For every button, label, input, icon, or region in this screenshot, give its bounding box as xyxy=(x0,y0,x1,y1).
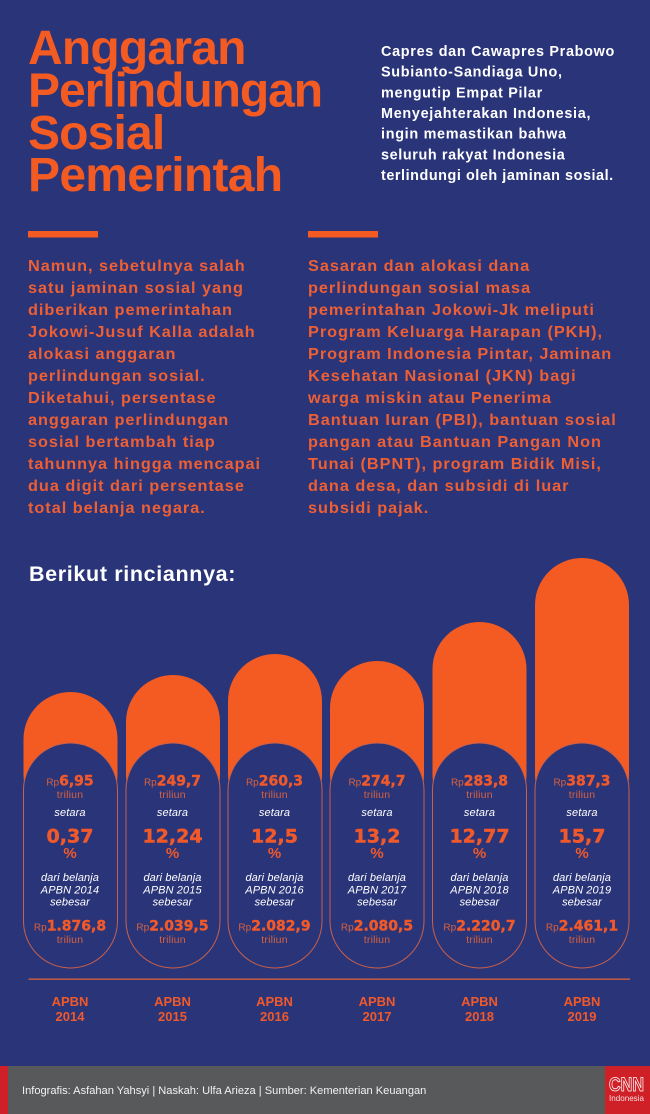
left body text: Diketahui, persentase xyxy=(28,390,217,407)
column: APBN 2016: APBN xyxy=(256,994,293,1009)
column: APBN 2015: Rp2.039,5 xyxy=(136,918,209,934)
title: Pemerintah xyxy=(28,149,282,202)
column: APBN 2015 xyxy=(126,675,220,1024)
right body text: dana desa, dan subsidi di luar xyxy=(308,478,569,495)
column: APBN 2019: triliun xyxy=(569,789,595,801)
intro text block: Menyejahterakan Indonesia, xyxy=(381,106,591,122)
column: APBN 2015: triliun xyxy=(159,934,186,946)
right body text: Bantuan Iuran (PBI), bantuan sosial xyxy=(308,412,617,429)
column: APBN 2018: APBN 2018 xyxy=(449,884,509,896)
column: APBN 2017: triliun xyxy=(364,789,390,801)
right body text: Kesehatan Nasional (JKN) bagi xyxy=(308,368,577,385)
column: APBN 2014: APBN xyxy=(52,994,88,1009)
right body text: Sasaran dan alokasi dana xyxy=(308,258,530,275)
left body text: tahunnya hingga mencapai xyxy=(28,456,261,473)
column: APBN 2016: 2016 xyxy=(260,1009,289,1024)
intro text block xyxy=(381,44,615,184)
logo: CNN Indonesia: CNN xyxy=(609,1074,644,1096)
column: APBN 2015: % xyxy=(166,845,179,862)
right column accent bar xyxy=(308,231,378,238)
column: APBN 2017: Rp274,7 xyxy=(348,774,406,790)
column: APBN 2017: % xyxy=(370,845,384,862)
intro text block: Capres dan Cawapres Prabowo xyxy=(381,44,615,60)
column: APBN 2016: APBN 2016 xyxy=(244,884,304,896)
column: APBN 2017: 13,2 xyxy=(354,826,400,848)
column: APBN 2017: sebesar xyxy=(357,897,398,909)
right body text: pemerintahan Jokowi-Jk meliputi xyxy=(308,302,595,319)
title xyxy=(28,22,322,202)
column: APBN 2019: triliun xyxy=(569,934,595,946)
right body text: perlindungan sosial masa xyxy=(308,280,531,297)
column: APBN 2018: Rp283,8 xyxy=(451,774,508,790)
left body text: sosial bertambah tiap xyxy=(28,434,216,451)
intro text block: terlindungi oleh jaminan sosial. xyxy=(381,168,614,184)
column: APBN 2016: triliun xyxy=(261,934,288,946)
column: APBN 2018: 2018 xyxy=(465,1009,494,1024)
column: APBN 2018: APBN xyxy=(461,994,498,1009)
column: APBN 2019: % xyxy=(575,845,589,862)
column: APBN 2019: sebesar xyxy=(562,897,603,909)
column: APBN 2018: sebesar xyxy=(460,897,501,909)
title: Perlindungan xyxy=(28,64,322,118)
column: APBN 2018: triliun xyxy=(466,789,493,801)
column: APBN 2014 xyxy=(24,692,118,1024)
left body text xyxy=(28,258,261,517)
left body text: satu jaminan sosial yang xyxy=(28,280,244,297)
left body text: anggaran perlindungan xyxy=(28,412,229,429)
left body text: alokasi anggaran xyxy=(28,346,176,363)
right body text: pangan atau Bantuan Pangan Non xyxy=(308,434,602,451)
left column accent bar xyxy=(28,231,98,238)
column: APBN 2016 xyxy=(228,654,322,1024)
title: Sosial xyxy=(28,107,164,160)
left body text: perlindungan sosial. xyxy=(28,368,206,385)
column: APBN 2017: 2017 xyxy=(363,1009,391,1024)
column: APBN 2015: triliun xyxy=(159,789,186,801)
column: APBN 2016: triliun xyxy=(261,789,288,801)
right body text: warga miskin atau Penerima xyxy=(307,390,552,407)
column: APBN 2015: sebesar xyxy=(153,897,194,909)
column: APBN 2015: dari belanja xyxy=(143,872,202,884)
column: APBN 2014: triliun xyxy=(57,789,83,801)
left body text: Namun, sebetulnya salah xyxy=(28,258,246,275)
column: APBN 2016: Rp260,3 xyxy=(246,774,303,790)
column: APBN 2017: dari belanja xyxy=(348,872,406,884)
column: APBN 2019: Rp387,3 xyxy=(553,774,611,790)
logo: CNN Indonesia: Indonesia xyxy=(609,1093,644,1103)
column: APBN 2015: 12,24 xyxy=(142,826,203,848)
column: APBN 2014: dari belanja xyxy=(41,872,99,884)
column: APBN 2014: setara xyxy=(54,807,86,819)
column: APBN 2016: % xyxy=(268,845,281,862)
column: APBN 2019: 2019 xyxy=(568,1009,596,1024)
left body text: total belanja negara. xyxy=(28,500,206,517)
column: APBN 2017: triliun xyxy=(364,934,390,946)
column: APBN 2016: 12,5 xyxy=(251,826,298,848)
column: APBN 2015: setara xyxy=(157,807,188,819)
column: APBN 2018: dari belanja xyxy=(450,872,509,884)
column: APBN 2015: Rp249,7 xyxy=(144,774,201,790)
right body text: subsidi pajak. xyxy=(308,500,429,517)
column: APBN 2014: % xyxy=(63,845,77,862)
right body text xyxy=(307,258,617,517)
left body text: dua digit dari persentase xyxy=(28,478,245,495)
right body text: Tunai (BPNT), program Bidik Misi, xyxy=(308,456,602,473)
column: APBN 2018: setara xyxy=(464,807,495,819)
right body text: Program Keluarga Harapan (PKH), xyxy=(308,324,603,341)
column: APBN 2018: % xyxy=(473,845,486,862)
column: APBN 2019: dari belanja xyxy=(553,872,611,884)
intro text block: seluruh rakyat Indonesia xyxy=(381,147,566,163)
column: APBN 2018 xyxy=(432,622,526,1024)
column: APBN 2018: triliun xyxy=(466,934,493,946)
column: APBN 2015: APBN xyxy=(154,994,191,1009)
column: APBN 2014: triliun xyxy=(57,934,83,946)
intro text block: mengutip Empat Pilar xyxy=(381,85,543,101)
column: APBN 2019: Rp2.461,1 xyxy=(546,918,618,934)
column: APBN 2019: setara xyxy=(566,807,598,819)
intro text block: ingin memastikan bahwa xyxy=(381,127,567,143)
column: APBN 2019: APBN 2019 xyxy=(552,884,611,896)
column: APBN 2014: Rp1.876,8 xyxy=(34,918,106,934)
column: APBN 2017 xyxy=(330,661,424,1024)
column: APBN 2017: setara xyxy=(361,807,393,819)
column: APBN 2015: 2015 xyxy=(158,1009,187,1024)
column: APBN 2017: APBN xyxy=(359,994,395,1009)
column: APBN 2019: APBN xyxy=(564,994,600,1009)
column: APBN 2016: Rp2.082,9 xyxy=(238,918,311,934)
column: APBN 2018: Rp2.220,7 xyxy=(443,918,516,934)
footer credits: Infografis: Asfahan Yahsyi | Naskah: Ulfa Arieza | Sumber: Kementerian Keuangan xyxy=(22,1085,426,1097)
column: APBN 2018: 12,77 xyxy=(449,826,510,848)
left body text: diberikan pemerintahan xyxy=(28,302,233,319)
right body text: Program Indonesia Pintar, Jaminan xyxy=(308,346,612,363)
column: APBN 2014: 2014 xyxy=(56,1009,85,1024)
column: APBN 2016: sebesar xyxy=(255,897,296,909)
column: APBN 2017: Rp2.080,5 xyxy=(341,918,413,934)
column: APBN 2014: sebesar xyxy=(50,897,91,909)
column: APBN 2014: 0,37 xyxy=(47,826,93,848)
title: Anggaran xyxy=(28,22,246,75)
column: APBN 2016: setara xyxy=(259,807,290,819)
section heading: Berikut rinciannya: xyxy=(29,562,236,586)
column: APBN 2019 xyxy=(535,558,629,1024)
footer xyxy=(0,1066,650,1114)
column: APBN 2015: APBN 2015 xyxy=(142,884,202,896)
logo: CNN Indonesia xyxy=(605,1066,650,1114)
left body text: Jokowi-Jusuf Kalla adalah xyxy=(28,324,256,341)
column: APBN 2014: APBN 2014 xyxy=(40,884,99,896)
column: APBN 2014: Rp6,95 xyxy=(46,774,94,790)
intro text block: Subianto-Sandiaga Uno, xyxy=(381,65,563,81)
column: APBN 2019: 15,7 xyxy=(559,826,605,848)
column: APBN 2017: APBN 2017 xyxy=(347,884,407,896)
column: APBN 2016: dari belanja xyxy=(245,872,304,884)
